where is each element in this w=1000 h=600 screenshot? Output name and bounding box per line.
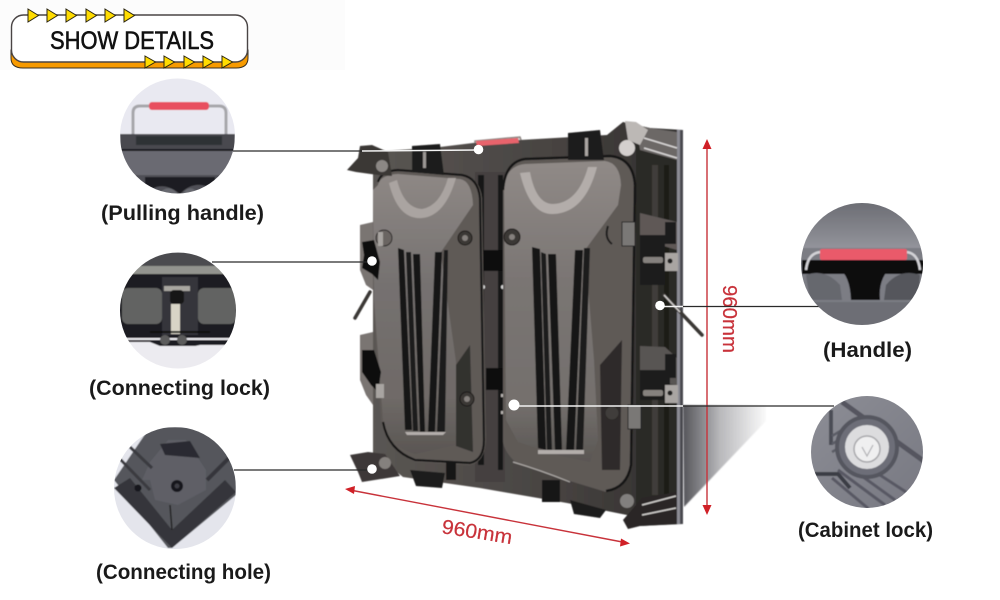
detail circle: connecting hole bbox=[114, 427, 236, 549]
left side brackets bbox=[360, 222, 373, 405]
detail circle: pulling handle bbox=[120, 78, 235, 194]
dimension arrow: height bbox=[702, 139, 712, 515]
dimension arrow: width bbox=[345, 486, 630, 546]
cabinet body bbox=[373, 122, 683, 526]
label: cabinet lock: (Cabinet lock) bbox=[798, 519, 933, 542]
callout leader: connecting lock bbox=[212, 256, 377, 266]
left latch hardware bbox=[355, 232, 702, 398]
right side frame bbox=[636, 125, 683, 524]
callout leader: connecting hole bbox=[234, 464, 377, 474]
LED cabinet photo bbox=[347, 121, 702, 529]
callout leader: handle bbox=[655, 301, 820, 310]
right module panel bbox=[503, 156, 641, 492]
bottom feet bbox=[410, 462, 606, 518]
top latches bbox=[412, 130, 604, 175]
label: pulling handle: (Pulling handle) bbox=[101, 202, 264, 225]
detail circle: cabinet lock bbox=[811, 396, 923, 508]
cabinet shadow bbox=[683, 405, 766, 507]
callout leader: pulling handle bbox=[233, 145, 483, 154]
dimension label: height 960mm: 960mm bbox=[718, 285, 740, 353]
badge: show details bbox=[11, 9, 248, 68]
label: handle: (Handle) bbox=[823, 339, 912, 362]
yellow arrow row, bottom bbox=[145, 56, 232, 68]
label: connecting lock: (Connecting lock) bbox=[89, 377, 270, 400]
detail circle: connecting lock bbox=[118, 250, 240, 370]
left module panel bbox=[373, 169, 486, 465]
detail circle: handle bbox=[801, 203, 923, 325]
centre column bbox=[475, 172, 507, 482]
dimension label: width 960mm: 960mm bbox=[440, 516, 514, 549]
corner connectors bbox=[347, 121, 677, 529]
yellow arrow row, top bbox=[28, 9, 134, 22]
label: connecting hole: (Connecting hole) bbox=[96, 561, 271, 584]
callout leader: cabinet lock bbox=[508, 400, 834, 410]
heading: show details: SHOW DETAILS bbox=[50, 27, 214, 55]
red pull handle on top bbox=[475, 137, 523, 150]
